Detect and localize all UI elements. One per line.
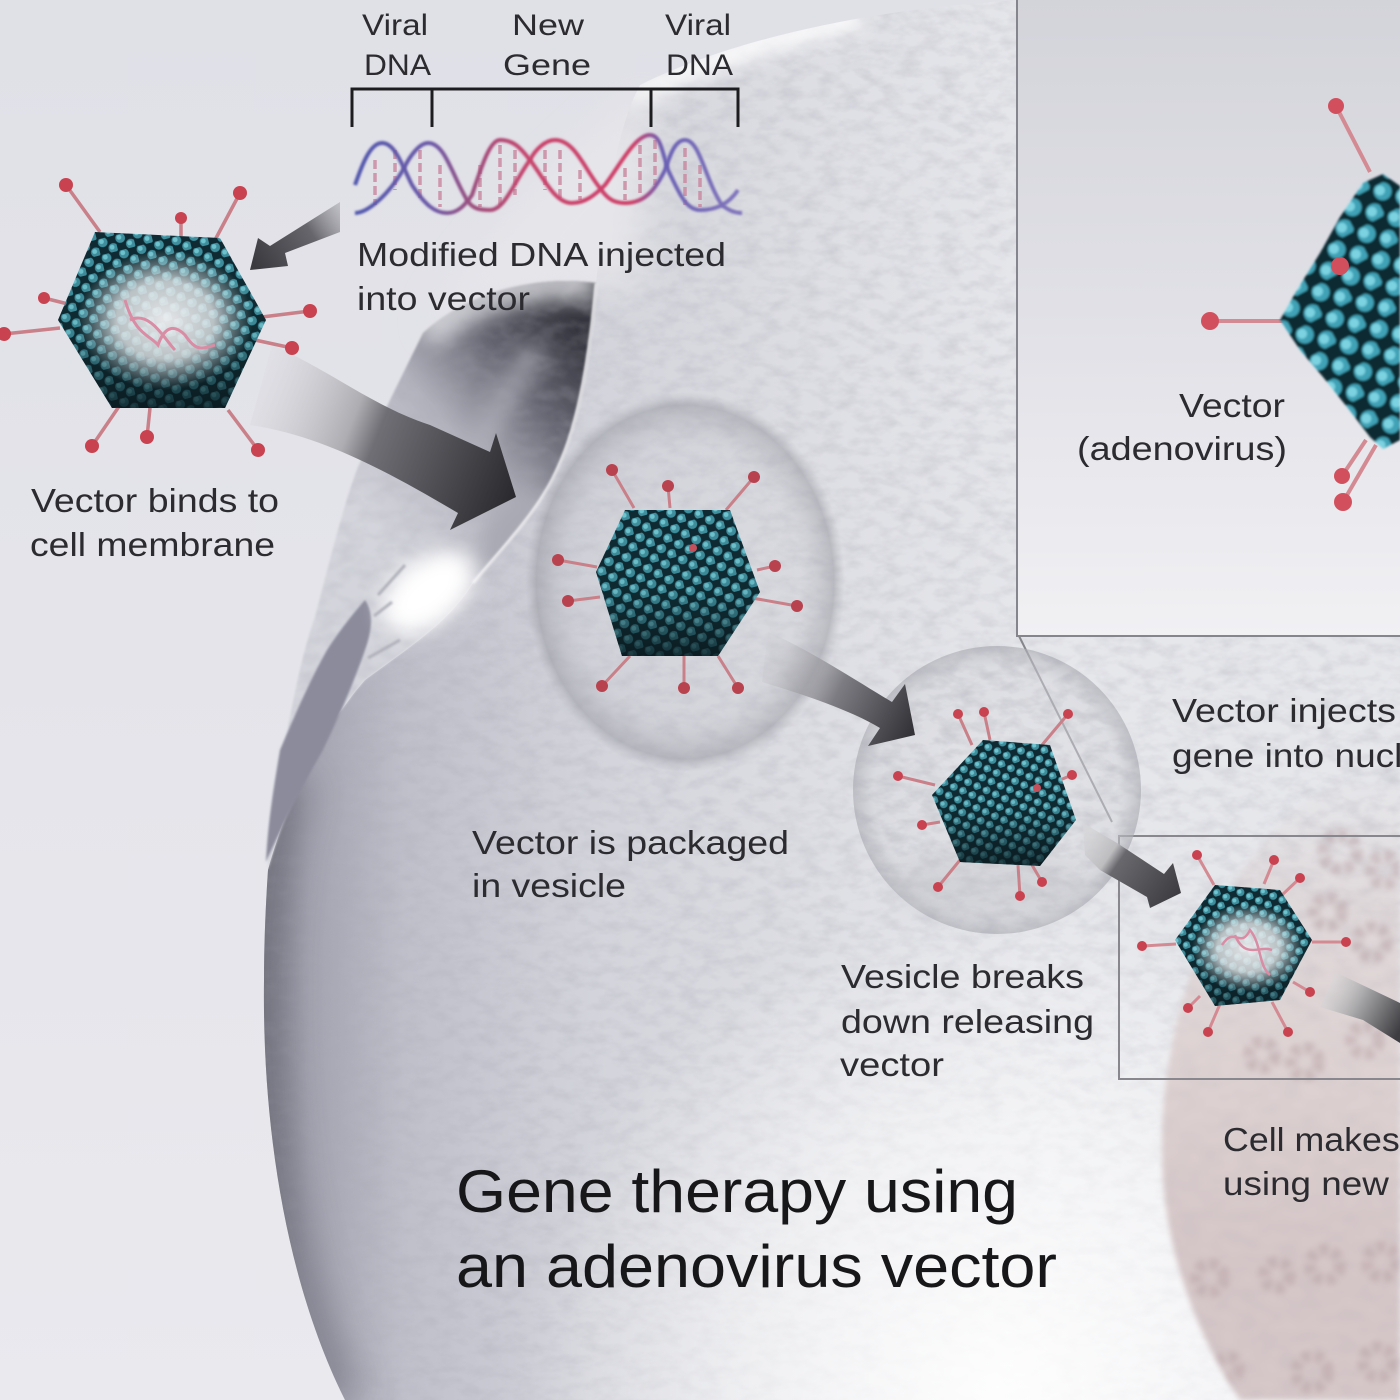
arrow: vector into cell xyxy=(250,345,516,530)
arrow: DNA into vector xyxy=(250,202,340,270)
text: Vector injects gene: Vector injects xyxy=(1172,692,1396,729)
label: DNA segment brackets: DNA xyxy=(666,49,733,82)
illustration: bright flash xyxy=(367,535,489,658)
label: DNA segment brackets xyxy=(352,9,738,127)
text: Vesicle breaks down xyxy=(840,958,1094,1083)
text: Vector packaged xyxy=(472,824,789,904)
label: DNA segment brackets: Gene xyxy=(503,49,591,82)
text: Cell makes protein xyxy=(1223,1121,1400,1202)
title: an adenovirus vector xyxy=(456,1233,1057,1300)
arrow: toward nucleus xyxy=(1320,972,1400,1043)
illustration: pink target nucleus xyxy=(1160,825,1400,1400)
illustration: soft upper membrane blend xyxy=(430,90,650,330)
text: Vector binds: cell membrane xyxy=(30,526,275,563)
title xyxy=(456,1158,1057,1300)
icon: vector inside vesicle xyxy=(552,464,803,694)
icon: vector in protein stage xyxy=(1137,850,1351,1037)
vesicle: packaged vector xyxy=(525,392,845,772)
illustration: membrane indentation xyxy=(260,270,610,880)
panel: adenovirus inset xyxy=(1017,0,1400,636)
label: DNA segment brackets: New xyxy=(512,9,584,42)
illustration: gray membrane streak xyxy=(266,600,371,862)
text: Vector packaged: in vesicle xyxy=(472,867,626,904)
vesicle: breaking down xyxy=(850,640,1150,940)
text: Vesicle breaks down: down releasing xyxy=(841,1003,1094,1040)
text: Modified DNA xyxy=(357,236,726,317)
text: Vector injects gene xyxy=(1172,692,1400,774)
text: Modified DNA: Modified DNA injected xyxy=(357,236,726,273)
text: Vector adenovirus label xyxy=(1077,387,1287,467)
title: Gene therapy using xyxy=(456,1158,1018,1225)
panel: protein production inset frame xyxy=(1119,836,1400,1079)
icon: large adenovirus vector xyxy=(1201,98,1400,511)
icon: DNA double helix xyxy=(355,135,742,213)
text: Vector adenovirus label: (adenovirus) xyxy=(1077,430,1287,467)
text: Vector binds xyxy=(30,482,279,563)
icon: vector binding to membrane xyxy=(0,178,317,457)
text: Vesicle breaks down: Vesicle breaks xyxy=(841,958,1084,995)
text: Modified DNA: into vector xyxy=(357,280,530,317)
text: Vesicle breaks down: vector xyxy=(840,1046,944,1083)
text: Vector adenovirus label: Vector xyxy=(1179,387,1285,424)
arrow: vector leaves vesicle xyxy=(1083,823,1181,908)
callout line linking vesicle stage to inset xyxy=(1019,636,1112,822)
icon: vector released from vesicle xyxy=(893,707,1077,901)
label: DNA segment brackets: Viral xyxy=(362,9,428,42)
text: Vector packaged: Vector is packaged xyxy=(472,824,789,861)
label: DNA segment brackets: Viral xyxy=(665,9,731,42)
arrow: vesicle moves through cell xyxy=(762,632,915,746)
icon: DNA inside vector xyxy=(125,300,215,350)
text: Vector binds: Vector binds to xyxy=(31,482,279,519)
label: DNA segment brackets: DNA xyxy=(364,49,431,82)
